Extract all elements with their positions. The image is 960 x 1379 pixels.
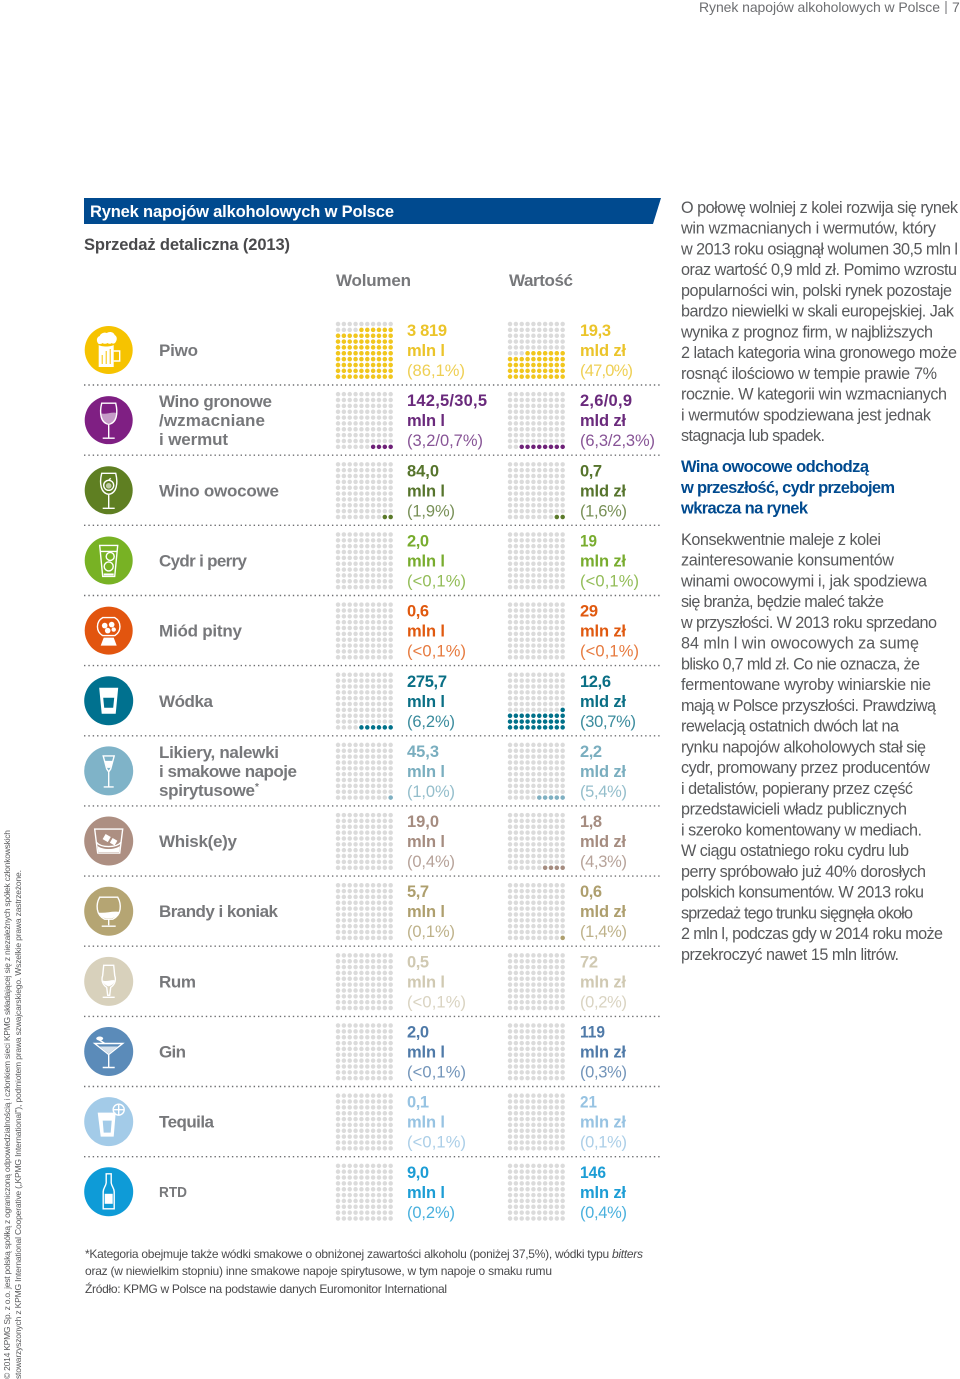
- volume figures: 0,1: [407, 1094, 429, 1112]
- row: Piwo: [85, 322, 633, 380]
- volume figures: (<0,1%): [407, 993, 466, 1011]
- value figures: mld zł: [580, 412, 626, 430]
- dot grid: value: [510, 885, 563, 938]
- volume figures: 3 819: [407, 322, 447, 340]
- text block: fruit wines and cider: mają w Polsce przyszłości. Prawdziwą: [681, 697, 936, 715]
- volume figures: (<0,1%): [407, 572, 466, 590]
- text block: fruit wines and cider: W ciągu ostatniego roku cydru lub: [681, 842, 909, 860]
- text block: wine market: popularności win, polski rynek pozostaje: [681, 282, 952, 300]
- value figures: 119: [580, 1024, 605, 1042]
- text block: wine market: wynika z prognoz firm, w najbliższych: [680, 324, 933, 342]
- value figures: [580, 322, 633, 380]
- dot grid: value: [510, 534, 563, 587]
- text block: fruit wines and cider: rewelacją ostatnich dwóch lat na: [681, 718, 899, 736]
- value figures: 19,3: [580, 322, 611, 340]
- subheading: fruit wines and cider: w przeszłość, cydr przebojem: [680, 479, 895, 497]
- text block: wine market: bardzo niewielki w skali europejskiej. Jak: [681, 303, 955, 321]
- label: Cydr i perry: [159, 551, 248, 570]
- text block: fruit wines and cider: sprzedaż tego trunku sięgnęła około: [681, 904, 913, 922]
- label: i wermut: [159, 430, 228, 449]
- dot grid: volume: [338, 394, 391, 447]
- value figures: (6,3/2,3%): [580, 432, 655, 450]
- volume figures: [407, 743, 455, 801]
- volume figures: [407, 322, 465, 380]
- value figures: mld zł: [580, 342, 626, 360]
- text block: fruit wines and cider: 84 mln l win owocowych za sumę: [681, 635, 919, 653]
- dot grid: volume: [338, 885, 391, 938]
- row: Wódka: [84, 673, 636, 731]
- text block: fruit wines and cider: 2 mln l, podczas gdy w 2014 roku może: [681, 925, 943, 943]
- dot grid: value: [510, 815, 563, 868]
- volume figures: (<0,1%): [407, 1134, 466, 1152]
- footnote and source: Źródło: KPMG w Polsce na podstawie danych Euromonitor International: [85, 1281, 447, 1296]
- value figures: mld zł: [580, 833, 626, 851]
- text block: fruit wines and cider: polskich konsumentów. W 2013 roku: [681, 884, 924, 902]
- volume figures: mln l: [407, 482, 445, 500]
- value figures: mln zł: [580, 623, 626, 641]
- volume figures: [407, 673, 455, 731]
- value figures: [580, 532, 639, 590]
- text block: fruit wines and cider: blisko 0,7 mld zł. Co nie oznacza, że: [681, 656, 920, 674]
- volume figures: 5,7: [407, 883, 429, 901]
- volume figures: mln l: [407, 903, 445, 921]
- text block: wine market: O połowę wolniej z kolei rozwija się rynek: [681, 199, 959, 217]
- legal note: stowarzyszonych z KPMG International Cooperative („KPMG International”), podmiotem prawa szwajcarskiego. Wszelkie prawa zastrzeżone.: [13, 870, 23, 1379]
- row: Rum: [84, 953, 627, 1011]
- label: Wino owocowe: [159, 481, 279, 500]
- footnote and source: oraz (w niewielkim stopniu) inne smakowe napoje spirytusowe, w tym napoje o smaku rumu: [85, 1264, 552, 1278]
- row: Brandy i koniak: [84, 883, 627, 941]
- value figures: [580, 1024, 627, 1082]
- icon: beer mug: [85, 326, 133, 374]
- dot grid: value: [510, 955, 563, 1008]
- volume figures: mln l: [407, 1044, 445, 1062]
- volume figures: 84,0: [407, 462, 439, 480]
- value figures: (4,3%): [580, 853, 627, 871]
- volume figures: 45,3: [407, 743, 439, 761]
- volume figures: mln l: [407, 833, 445, 851]
- icon: martini glass: [84, 1027, 133, 1076]
- volume figures: mln l: [407, 412, 445, 430]
- value figures: 12,6: [580, 673, 611, 691]
- text block: fruit wines and cider: w przyszłości. W 2013 roku sprzedano: [680, 614, 937, 632]
- text block: wine market: win wzmacnianych i wermutów, który: [680, 220, 937, 238]
- value figures: 146: [580, 1164, 606, 1182]
- text block: fruit wines and cider: [680, 531, 943, 964]
- label: Gin: [159, 1042, 186, 1062]
- text block: fruit wines and cider: Konsekwentnie maleje z kolei: [681, 531, 881, 549]
- legal note: [2, 830, 23, 1379]
- volume figures: (1,0%): [407, 783, 455, 801]
- icon: tequila shot with lime: [84, 1097, 133, 1146]
- row: Likiery: [84, 743, 627, 801]
- icon: mead glass: [85, 607, 133, 655]
- volume figures: 275,7: [407, 673, 447, 691]
- text block: fruit wines and cider: fermentowane wyroby winiarskie nie: [681, 676, 931, 694]
- row: RTD: [84, 1164, 627, 1222]
- value figures: mld zł: [580, 693, 626, 711]
- label: spirytusowe: [159, 781, 255, 800]
- value figures: mln zł: [580, 973, 626, 991]
- label: Rum: [159, 972, 196, 991]
- volume figures: 0,6: [407, 603, 429, 621]
- icon: brandy snifter: [84, 887, 133, 936]
- value figures: mld zł: [580, 482, 626, 500]
- footnote and source: [85, 1247, 643, 1296]
- value figures: [580, 462, 627, 520]
- text block: wine market: i wermutów spodziewana jest jednak: [681, 406, 932, 424]
- dot grid: value: [510, 324, 563, 377]
- icon: bottle: [84, 1167, 133, 1216]
- volume figures: [407, 1094, 466, 1152]
- icon: fruit wine glass: [85, 466, 133, 514]
- dot grid: volume: [338, 815, 391, 868]
- volume figures: 9,0: [407, 1164, 429, 1182]
- text block: fruit wines and cider: rynku napojów alkoholowych stał się: [681, 738, 926, 756]
- subheading: fruit wines and cider: Wina owocowe odchodzą: [681, 458, 870, 476]
- value figures: (<0,1%): [580, 643, 639, 661]
- row: Gin: [84, 1024, 627, 1082]
- value figures: 2,6/0,9: [580, 392, 632, 410]
- value figures: 0,6: [580, 883, 602, 901]
- value figures: [580, 743, 627, 801]
- volume figures: (6,2%): [407, 713, 455, 731]
- subheading: fruit wines and cider: wkracza na rynek: [680, 500, 809, 518]
- dot grid: volume: [338, 605, 391, 657]
- value figures: (1,4%): [580, 923, 627, 941]
- volume figures: mln l: [407, 623, 445, 641]
- dot grid: value: [510, 1026, 563, 1078]
- value figures: mln zł: [580, 1044, 626, 1062]
- icon: rum glass: [84, 957, 133, 1006]
- value figures: (47,0%): [580, 362, 633, 380]
- value figures: 0,7: [580, 462, 602, 480]
- dot grid: value: [510, 1096, 563, 1148]
- text block: fruit wines and cider: zainteresowanie konsumentów: [681, 552, 894, 570]
- legal note: © 2014 KPMG Sp. z o.o. jest polską spółką z ograniczoną odpowiedzialnością i członkiem sieci KPMG składającej się z niezależnych spółek członkowskich: [2, 830, 12, 1379]
- icon: liqueur glass: [84, 746, 133, 795]
- value figures: (30,7%): [580, 713, 636, 731]
- volume figures: mln l: [407, 1184, 445, 1202]
- footnote and source: *Kategoria obejmuje także wódki smakowe o obniżonej zawartości alkoholu (poniżej 37,5%), wódki typu bitters: [85, 1247, 643, 1261]
- volume figures: (0,1%): [407, 923, 455, 941]
- volume figures: [407, 883, 455, 941]
- dot grid: volume: [338, 1096, 391, 1148]
- dot grid: value: [510, 675, 563, 727]
- value figures: (1,6%): [580, 502, 627, 520]
- label: Likiery, nalewki: [159, 743, 279, 762]
- volume figures: (0,2%): [407, 1204, 455, 1222]
- icon: cider glass: [85, 536, 133, 584]
- label: Piwo: [159, 341, 198, 360]
- row: Tequila: [84, 1094, 627, 1152]
- volume figures: [407, 1164, 455, 1222]
- volume figures: 19,0: [407, 813, 439, 831]
- label: *: [255, 782, 259, 793]
- row: Wino gronowe: [85, 392, 655, 450]
- dot grid: value: [510, 1166, 563, 1218]
- label: [159, 392, 272, 449]
- volume figures: 0,5: [407, 953, 429, 971]
- text block: fruit wines and cider: i szeroko komentowany w mediach.: [681, 822, 922, 840]
- value figures: [580, 883, 627, 941]
- label: Miód pitny: [159, 622, 243, 641]
- volume figures: [407, 953, 466, 1011]
- text block: wine market: stagnacja lub spadek.: [681, 427, 825, 445]
- volume figures: mln l: [407, 973, 445, 991]
- value figures: 21: [580, 1094, 597, 1112]
- volume figures: (3,2/0,7%): [407, 432, 483, 450]
- title banner: [84, 198, 661, 224]
- label: i smakowe napoje: [159, 762, 297, 781]
- value figures: (0,3%): [580, 1064, 627, 1082]
- label: Wódka: [159, 692, 214, 711]
- value figures: mln zł: [580, 1114, 626, 1132]
- volume figures: (1,9%): [407, 502, 455, 520]
- row: Cydr i perry: [85, 532, 639, 590]
- volume figures: 142,5/30,5: [407, 392, 487, 410]
- icon: shot glass: [84, 676, 133, 725]
- text block: fruit wines and cider: cydr, promowany przez producentów: [681, 759, 930, 777]
- value figures: 72: [580, 953, 598, 971]
- volume figures: mln l: [407, 693, 445, 711]
- label: /wzmacniane: [159, 411, 265, 430]
- dot grid: volume: [338, 534, 391, 587]
- value figures: [580, 603, 639, 661]
- text block: wine market: rocznie. W kategorii win wzmacnianych: [681, 386, 947, 404]
- dot grid: value: [510, 464, 563, 517]
- dot grid: volume: [338, 324, 391, 377]
- text block: fruit wines and cider: się branża, będzie maleć także: [681, 593, 884, 611]
- dot grid: volume: [338, 1026, 391, 1078]
- dot grid: value: [510, 394, 563, 447]
- volume figures: mln l: [407, 342, 445, 360]
- value figures: [580, 673, 636, 731]
- text block: fruit wines and cider: winami owocowymi i, jak spodziewa: [680, 572, 927, 590]
- label: Wino gronowe: [159, 392, 272, 411]
- dot grid: value: [510, 745, 563, 798]
- value figures: [580, 813, 627, 871]
- volume figures: [407, 1024, 466, 1082]
- value figures: (<0,1%): [580, 572, 639, 590]
- volume figures: 2,0: [407, 1024, 429, 1042]
- value figures: [580, 1164, 627, 1222]
- volume figures: (86,1%): [407, 362, 465, 380]
- value figures: (5,4%): [580, 783, 627, 801]
- text block: wine market: [680, 199, 959, 445]
- value figures: 2,2: [580, 743, 602, 761]
- row: Wino owocowe: [85, 462, 627, 520]
- value figures: 19: [580, 532, 597, 550]
- column heading: value: Wartość: [509, 271, 573, 290]
- row: Whisky: [84, 813, 627, 871]
- label: Whisk(e)y: [159, 832, 238, 851]
- title banner: Rynek napojów alkoholowych w Polsce: [90, 203, 394, 221]
- volume figures: [407, 603, 466, 661]
- value figures: [580, 1094, 627, 1152]
- volume figures: [407, 813, 455, 871]
- label: Tequila: [159, 1113, 215, 1132]
- dot grid: volume: [338, 955, 391, 1008]
- text block: wine market: w 2013 roku osiągnął wolumen 30,5 mln l: [680, 240, 958, 258]
- row: Miód pitny: [85, 603, 639, 661]
- value figures: mld zł: [580, 903, 626, 921]
- volume figures: [407, 462, 455, 520]
- dot grid: volume: [338, 1166, 391, 1218]
- text block: fruit wines and cider: przedstawicieli władz publicznych: [681, 801, 907, 819]
- value figures: (0,4%): [580, 1204, 627, 1222]
- column heading: volume: Wolumen: [336, 271, 411, 290]
- volume figures: (<0,1%): [407, 1064, 466, 1082]
- dot grid: volume: [338, 745, 391, 798]
- value figures: mln zł: [580, 1184, 626, 1202]
- value figures: mld zł: [580, 763, 626, 781]
- label: RTD: [159, 1184, 187, 1201]
- volume figures: (0,4%): [407, 853, 455, 871]
- value figures: (0,2%): [580, 993, 627, 1011]
- text block: wine market: oraz wartość 0,9 mld zł. Pomimo wzrostu: [681, 261, 957, 279]
- value figures: [580, 392, 655, 450]
- volume figures: (<0,1%): [407, 643, 466, 661]
- volume figures: [407, 392, 487, 450]
- value figures: 1,8: [580, 813, 602, 831]
- text block: fruit wines and cider: i detalistów, popierany przez część: [681, 780, 913, 798]
- volume figures: mln l: [407, 1114, 445, 1132]
- dot grid: volume: [338, 464, 391, 517]
- volume figures: [407, 532, 466, 590]
- value figures: 29: [580, 603, 598, 621]
- label: [159, 743, 297, 800]
- text block: fruit wines and cider: przekroczyć nawet 15 mln litrów.: [681, 946, 899, 964]
- icon: wine glass: [85, 396, 133, 444]
- text block: wine market: 2 latach kategoria wina gronowego może: [681, 344, 957, 362]
- volume figures: 2,0: [407, 532, 429, 550]
- text block: wine market: rosnąć ilościowo w tempie prawie 7%: [681, 365, 937, 383]
- volume figures: mln l: [407, 552, 445, 570]
- value figures: (0,1%): [580, 1134, 627, 1152]
- dot grid: volume: [338, 675, 391, 727]
- value figures: [580, 953, 627, 1011]
- value figures: mln zł: [580, 552, 626, 570]
- dot grid: value: [510, 605, 563, 657]
- label: Brandy i koniak: [159, 902, 279, 921]
- subheading: fruit wines and cider: [680, 458, 895, 518]
- text block: fruit wines and cider: perry spróbowało już 40% dorosłych: [681, 863, 926, 881]
- volume figures: mln l: [407, 763, 445, 781]
- subtitle: Sprzedaż detaliczna (2013): [84, 236, 290, 254]
- icon: whisky tumbler: [84, 817, 133, 866]
